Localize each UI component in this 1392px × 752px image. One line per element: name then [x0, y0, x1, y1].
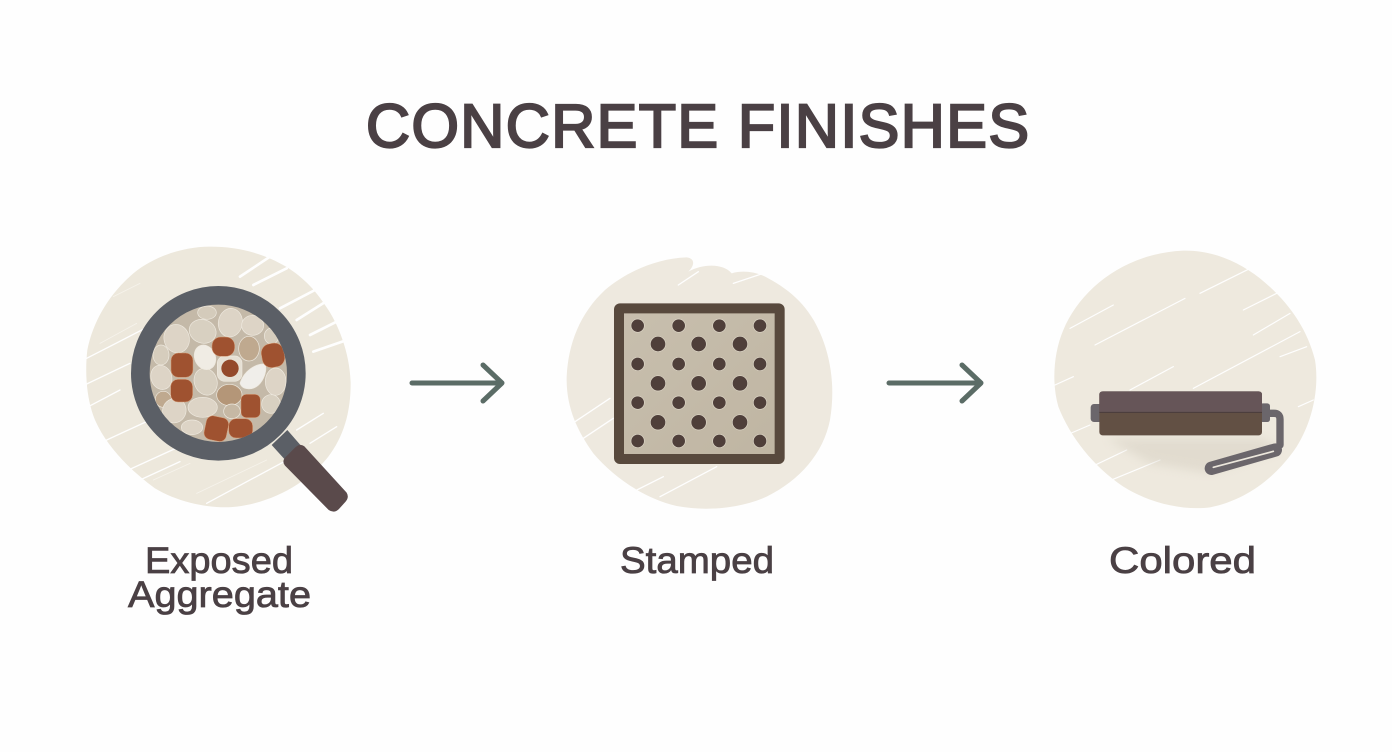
arrow: stamped to colored — [889, 365, 981, 401]
label: exposed aggregate — [128, 540, 311, 615]
stones — [147, 306, 286, 435]
icon: magnifying glass — [140, 295, 345, 509]
roller cylinder — [1099, 391, 1262, 435]
lens handle — [286, 447, 345, 509]
label: colored: Colored — [1109, 540, 1256, 581]
lens neck — [272, 430, 303, 463]
panel: stamped — [567, 257, 832, 581]
label: exposed aggregate: Exposed — [145, 540, 293, 581]
icon: textured background circle — [1054, 251, 1316, 508]
roller frame and handle — [1211, 413, 1280, 468]
arrow: exposed to stamped — [412, 365, 502, 401]
label: exposed aggregate: Aggregate — [128, 574, 311, 615]
label: stamped: Stamped — [620, 540, 774, 581]
panel: exposed aggregate — [86, 247, 352, 615]
panel: colored — [1054, 251, 1316, 581]
roller shadow — [1107, 438, 1280, 473]
title: CONCRETE FINISHES — [366, 92, 1029, 160]
lens ring — [140, 295, 296, 451]
icon: textured background circle — [86, 247, 352, 507]
icon: paint roller — [1091, 391, 1280, 473]
icon: stamped square — [619, 308, 780, 459]
icon: textured background circle — [567, 257, 832, 509]
stamped dots — [631, 319, 767, 448]
